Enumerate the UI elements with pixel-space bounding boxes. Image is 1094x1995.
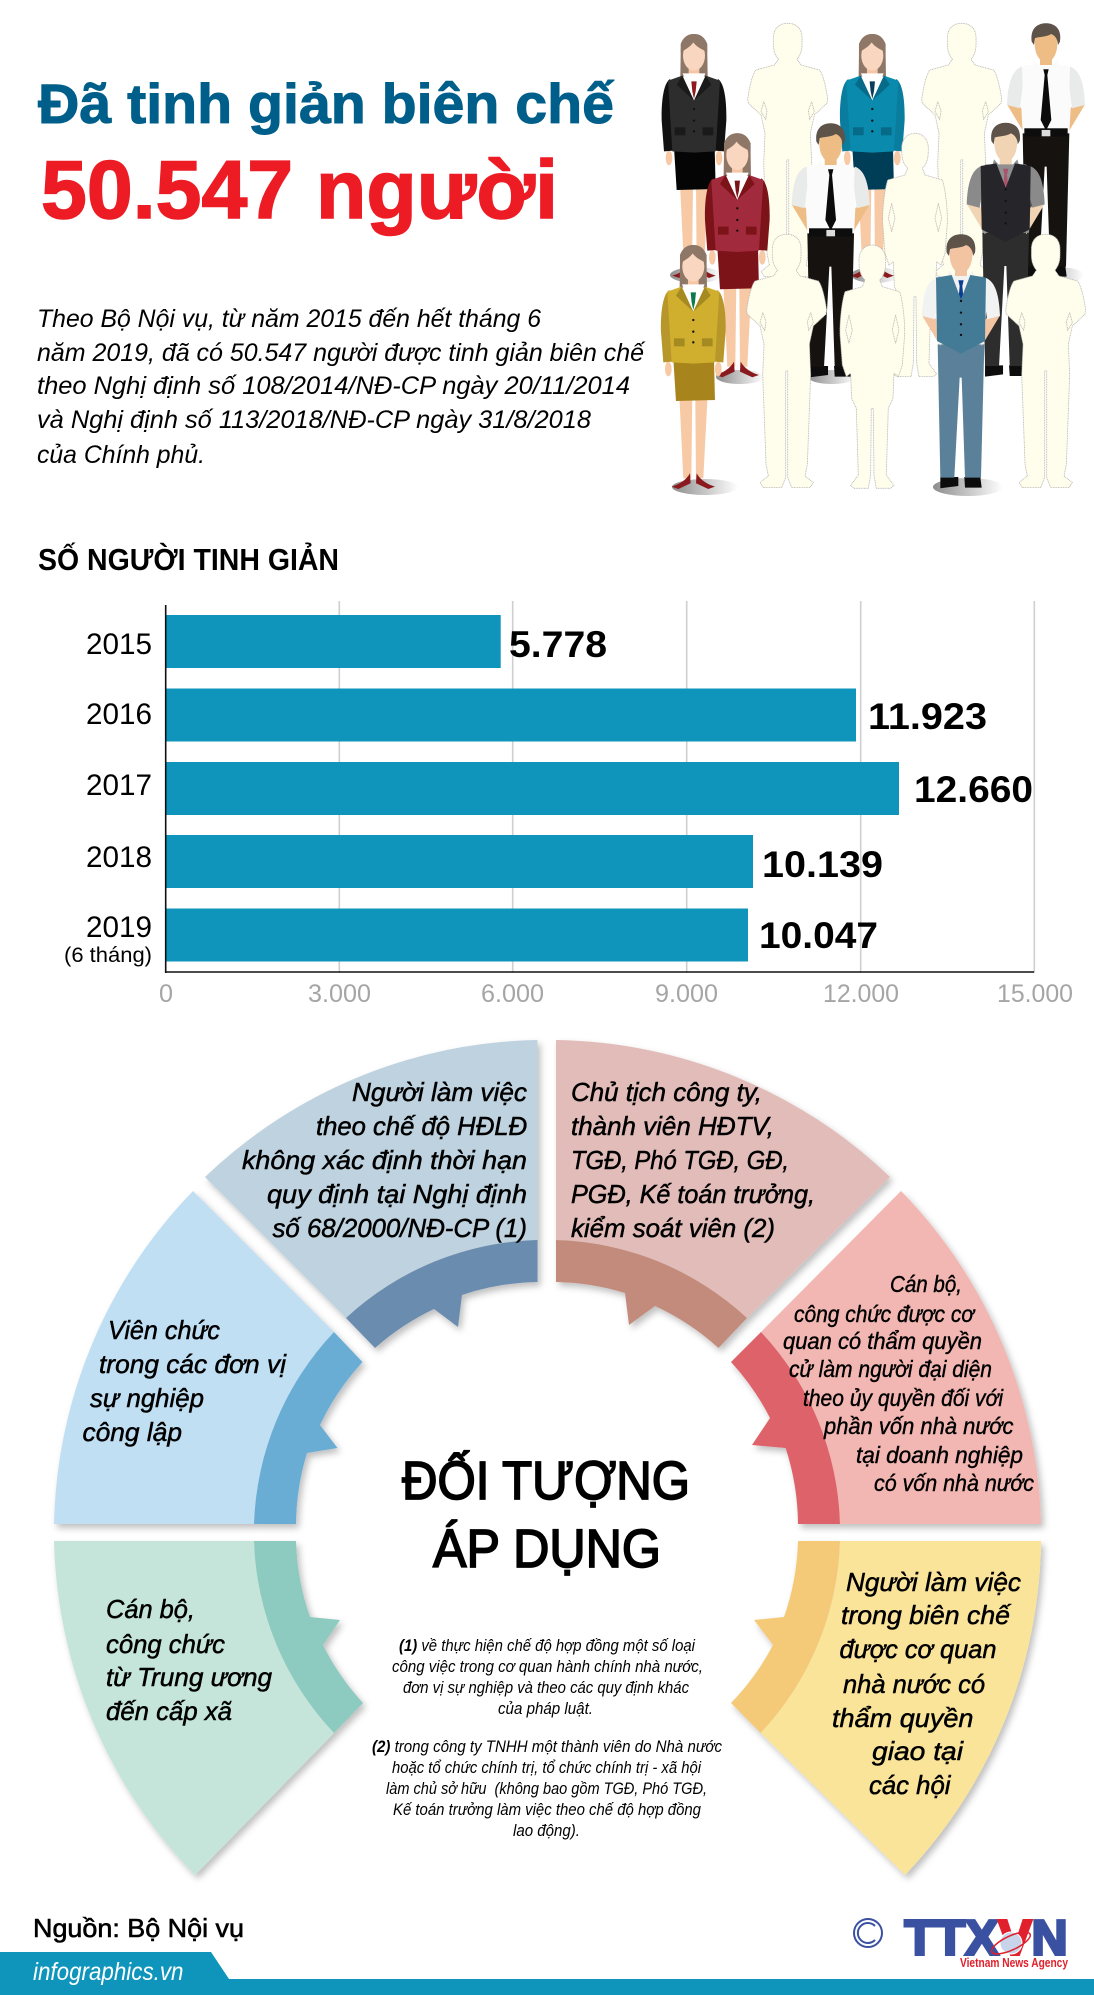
- centre heading: ĐỐI TƯỢNG: [402, 1451, 690, 1511]
- footnotes: đơn vị sự nghiệp và theo các quy định khác: [403, 1678, 689, 1697]
- footer site name: infographics.vn: [33, 1958, 184, 1986]
- panel: Cán bộ, công chức đại diện vốn nhà nước: phần vốn nhà nước: [823, 1413, 1014, 1439]
- value labels: 10.139: [762, 844, 883, 885]
- title block: [38, 72, 615, 236]
- panel: Cán bộ, công chức từ Trung ương đến cấp xã: Cán bộ,: [106, 1594, 195, 1624]
- x axis labels: 3.000: [308, 980, 371, 1008]
- panel: Người làm việc theo chế độ HĐLĐ: theo chế độ HĐLĐ: [316, 1111, 527, 1141]
- panel: Cán bộ, công chức đại diện vốn nhà nước: có vốn nhà nước: [874, 1470, 1034, 1496]
- panel: Người làm việc trong biên chế: các hội: [869, 1770, 952, 1800]
- x axis labels: 12.000: [823, 980, 899, 1008]
- footnotes: công việc trong cơ quan hành chính nhà nước,: [392, 1657, 703, 1676]
- panel: Người làm việc theo chế độ HĐLĐ: Người làm việc: [352, 1077, 527, 1107]
- panel: Chủ tịch công ty: kiểm soát viên (2): [571, 1213, 775, 1243]
- panel: Cán bộ, công chức từ Trung ương đến cấp xã: [54, 1541, 363, 1875]
- intro paragraph: [37, 305, 646, 469]
- value labels: 5.778: [509, 624, 607, 665]
- panel: Viên chức: công lập: [82, 1417, 182, 1447]
- panel: Cán bộ, công chức đại diện vốn nhà nước: công chức được cơ: [794, 1301, 976, 1327]
- panel: Viên chức: trong các đơn vị: [99, 1349, 287, 1379]
- x axis labels: [159, 980, 1073, 1008]
- year labels: 2015: [86, 628, 152, 661]
- x axis labels: 0: [159, 980, 173, 1008]
- value labels: 11.923: [868, 696, 987, 737]
- footnotes: của pháp luật.: [498, 1699, 593, 1718]
- panel: Người làm việc theo chế độ HĐLĐ: [205, 1040, 538, 1348]
- logo globe: [989, 1928, 1033, 1958]
- panel: Chủ tịch công ty: [556, 1040, 890, 1348]
- panel: Cán bộ, công chức đại diện vốn nhà nước: cử làm người đại diện: [789, 1356, 992, 1382]
- panel: Người làm việc trong biên chế: thẩm quyền: [832, 1703, 974, 1733]
- year labels: [64, 628, 152, 967]
- panel: Viên chức: [54, 1191, 362, 1524]
- x axis labels: 9.000: [655, 980, 718, 1008]
- panel: Người làm việc trong biên chế: giao tại: [872, 1736, 964, 1766]
- intro paragraph: năm 2019, đã có 50.547 người được tinh giản biên chế: [37, 339, 646, 367]
- panel: Người làm việc theo chế độ HĐLĐ: quy định tại Nghị định: [267, 1179, 527, 1209]
- panel: Người làm việc trong biên chế: được cơ quan: [840, 1634, 996, 1664]
- title line 1: Đã tinh giản biên chế: [38, 72, 615, 135]
- panel: Người làm việc theo chế độ HĐLĐ: không xác định thời hạn: [242, 1145, 527, 1175]
- panel: Chủ tịch công ty: PGĐ, Kế toán trưởng,: [571, 1179, 815, 1209]
- panel: Người làm việc trong biên chế: [731, 1541, 1041, 1875]
- year labels: 2018: [86, 841, 152, 874]
- back row: [662, 23, 1085, 283]
- footnotes: hoặc tổ chức chính trị, tổ chức chính trị - xã hội: [392, 1758, 702, 1777]
- panel: Viên chức: sự nghiệp: [90, 1383, 204, 1413]
- panel: Người làm việc trong biên chế: trong biên chế: [841, 1600, 1012, 1630]
- intro paragraph: theo Nghị định số 108/2014/NĐ-CP ngày 20/11/2014: [37, 372, 630, 400]
- front row: [661, 234, 1086, 496]
- intro paragraph: Theo Bộ Nội vụ, từ năm 2015 đến hết tháng 6: [37, 305, 541, 333]
- footnotes: (2) trong công ty TNHH một thành viên do Nhà nước: [372, 1737, 722, 1756]
- panel: Viên chức: Viên chức: [108, 1315, 220, 1345]
- icon: copyright: [854, 1919, 882, 1947]
- footnotes: (1) về thực hiện chế độ hợp đồng một số loại: [399, 1636, 696, 1655]
- logo: TTXVN: TTXVN: [904, 1912, 1068, 1966]
- centre heading: [402, 1451, 690, 1579]
- footer band: [0, 1952, 1094, 1995]
- illustration: group of workers with empty silhouettes: [661, 23, 1086, 496]
- bars: [166, 615, 899, 962]
- panel: Cán bộ, công chức từ Trung ương đến cấp xã: công chức: [106, 1629, 225, 1659]
- panel: Người làm việc theo chế độ HĐLĐ: số 68/2000/NĐ-CP (1): [272, 1213, 527, 1243]
- source: Nguồn: Bộ Nội vụ: [33, 1913, 244, 1943]
- panel: Chủ tịch công ty: TGĐ, Phó TGĐ, GĐ,: [571, 1145, 789, 1175]
- year labels: 2016: [86, 698, 152, 731]
- panel: Chủ tịch công ty: Chủ tịch công ty,: [571, 1077, 762, 1107]
- middle row: [705, 123, 1045, 384]
- footnotes: làm chủ sở hữu (không bao gồm TGĐ, Phó TGĐ,: [386, 1779, 707, 1798]
- panel: Cán bộ, công chức từ Trung ương đến cấp xã: từ Trung ương: [106, 1662, 273, 1692]
- logo tagline: Vietnam News Agency: [960, 1955, 1069, 1970]
- panel: Chủ tịch công ty: thành viên HĐTV,: [571, 1111, 774, 1141]
- value labels: 10.047: [759, 915, 878, 956]
- value labels: 12.660: [914, 769, 1033, 810]
- title line 2: total: 50.547 người: [41, 143, 558, 236]
- x axis labels: 6.000: [481, 980, 544, 1008]
- footnotes: lao động).: [513, 1821, 580, 1840]
- panel: Cán bộ, công chức đại diện vốn nhà nước: theo ủy quyền đối với: [803, 1385, 1004, 1411]
- value labels: [509, 624, 1033, 956]
- panel: Người làm việc trong biên chế: Người làm việc: [846, 1567, 1021, 1597]
- year labels: 2019: [86, 911, 152, 944]
- bar chart: [64, 601, 1073, 1008]
- panel: Cán bộ, công chức đại diện vốn nhà nước: Cán bộ,: [890, 1271, 962, 1297]
- panel: Cán bộ, công chức đại diện vốn nhà nước: tại doanh nghiệp: [856, 1442, 1023, 1468]
- chart heading: SỐ NGƯỜI TINH GIẢN: [38, 541, 339, 577]
- intro paragraph: và Nghị định số 113/2018/NĐ-CP ngày 31/8/2018: [37, 406, 591, 434]
- footnotes: Kế toán trưởng làm việc theo chế độ hợp đồng: [393, 1800, 701, 1819]
- panel: Cán bộ, công chức đại diện vốn nhà nước: [731, 1191, 1041, 1524]
- panel: Người làm việc trong biên chế: nhà nước có: [843, 1669, 985, 1699]
- panel: Cán bộ, công chức đại diện vốn nhà nước: quan có thẩm quyền: [783, 1328, 982, 1354]
- year labels: 2017: [86, 769, 152, 802]
- x axis labels: 15.000: [997, 980, 1073, 1008]
- panel: Cán bộ, công chức từ Trung ương đến cấp xã: đến cấp xã: [106, 1696, 232, 1726]
- intro paragraph: của Chính phủ.: [37, 441, 205, 469]
- centre heading: ÁP DỤNG: [433, 1519, 661, 1579]
- footnotes: [372, 1636, 722, 1840]
- year labels: (6 tháng): [64, 944, 152, 967]
